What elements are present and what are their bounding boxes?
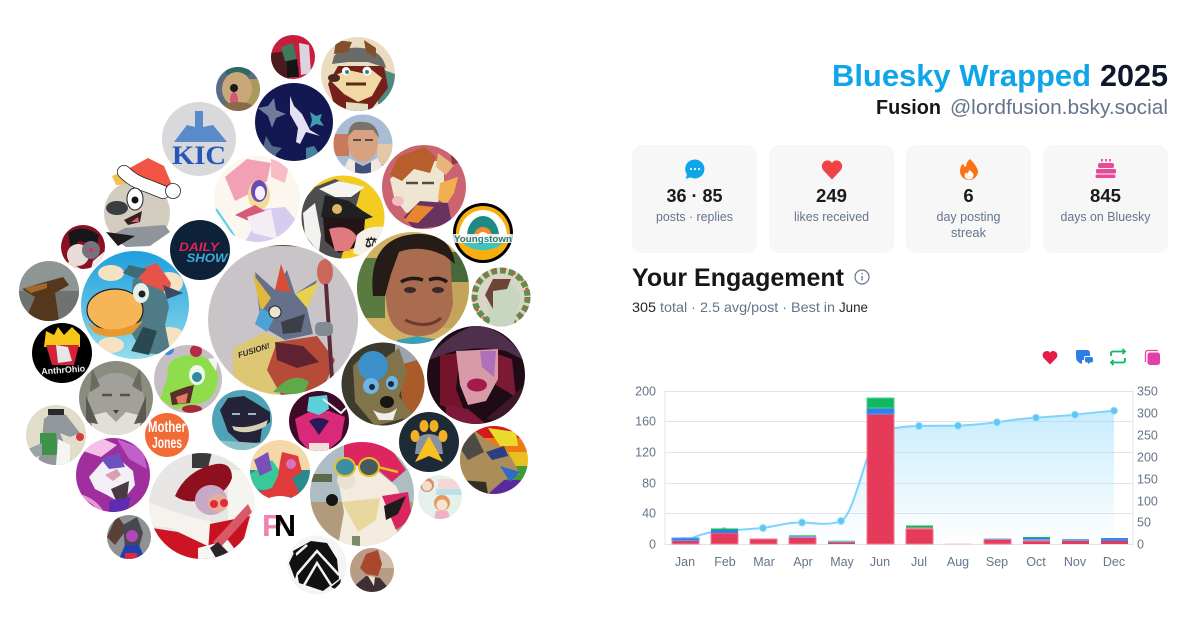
- user name and handle: @lordfusion.bsky.social: [950, 96, 1168, 119]
- avatar: blue mohawk fursuit: [341, 342, 425, 426]
- bar: May: [828, 540, 855, 544]
- bar: Mar: [750, 539, 777, 544]
- icon: quotes legend: [1146, 350, 1160, 365]
- right axis labels: 50: [1137, 516, 1151, 530]
- avatar: blue sky parrot: [81, 251, 189, 359]
- icon: cake: [1096, 159, 1116, 178]
- month labels: Feb: [714, 555, 736, 569]
- icon: info: [855, 270, 869, 284]
- engagement summary: total · 2.5 avg/post · Best in: [660, 299, 835, 315]
- right axis labels: 0: [1137, 538, 1144, 552]
- avatar: cream dragon: [382, 145, 466, 229]
- avatar: red hat cosplay: [149, 452, 256, 559]
- avatar: PN logo: P: [262, 508, 283, 543]
- panel: likes received: [769, 145, 894, 253]
- avatar: Mother Jones logo: [145, 413, 189, 457]
- avatar: main fusion artwork: [208, 245, 358, 395]
- left axis labels: [635, 384, 656, 552]
- avatar: holographic stars: [255, 83, 333, 166]
- icon: replies legend: [1076, 350, 1094, 366]
- month labels: Oct: [1026, 555, 1046, 569]
- panel: days on Bluesky: [1043, 145, 1168, 253]
- avatar: brown hat fox: [321, 37, 395, 111]
- avatar: Mother Jones logo: Mother: [148, 419, 186, 436]
- avatar: brown bird: [19, 261, 79, 321]
- avatar: chibi girl: [418, 475, 462, 519]
- month labels: [675, 555, 1125, 569]
- avatar: puppy: [216, 67, 260, 114]
- month labels: Aug: [947, 555, 969, 569]
- avatar: peacock logo: [453, 203, 513, 263]
- panel: day posting streak: day posting: [936, 210, 1001, 224]
- avatar: heart queen: [289, 391, 349, 451]
- panel: likes received: likes received: [794, 210, 869, 224]
- avatar: snarling badger: [301, 175, 386, 259]
- left axis labels: 120: [635, 446, 656, 460]
- chart grid: [665, 391, 1133, 545]
- avatar: gray wolf in green shirt: [26, 405, 86, 465]
- panel: posts and replies: [632, 145, 757, 253]
- icon: likes legend: [1043, 351, 1057, 364]
- month labels: Jul: [911, 555, 927, 569]
- avatar: pink fursuit with sunglasses: [310, 442, 414, 546]
- right axis labels: [1137, 384, 1158, 552]
- area under cumulative line: [685, 411, 1114, 544]
- bar: Sep: [984, 538, 1011, 544]
- right axis labels: 300: [1137, 406, 1158, 420]
- panel: posts and replies: posts · replies: [656, 210, 733, 224]
- avatar: red and black character: [61, 225, 105, 269]
- title: 2025: [1100, 59, 1168, 93]
- avatar: pink duck: [214, 156, 300, 242]
- bar: Jun: [867, 398, 894, 544]
- avatar: pony with wreath: [471, 267, 531, 327]
- avatar: AnthrOhio logo: [32, 323, 92, 383]
- title: Bluesky Wrapped: [832, 59, 1091, 93]
- chart: monthly engagement: [635, 384, 1158, 569]
- right axis labels: 200: [1137, 450, 1158, 464]
- icon: reposts legend: [1111, 349, 1125, 365]
- avatar: red pony: [250, 440, 310, 500]
- avatar cluster: [19, 35, 531, 595]
- avatar: dark dino: [212, 390, 272, 450]
- avatar: KIC logo: [162, 102, 236, 176]
- line points: [682, 407, 1118, 544]
- heading: your engagement: Your Engagement: [632, 264, 845, 292]
- avatar: PN logo: N: [274, 508, 296, 543]
- avatar: KIC logo: KIC: [172, 141, 226, 170]
- bar: Nov: [1062, 539, 1089, 544]
- avatar: Mother Jones logo: Jones: [152, 435, 182, 452]
- month labels: May: [830, 555, 855, 569]
- avatar: rainbow wolf: [460, 426, 528, 494]
- avatar: The Daily Show: [170, 220, 230, 280]
- month labels: Nov: [1064, 555, 1087, 569]
- panel: days on Bluesky: 845: [1090, 185, 1121, 206]
- bar: Aug: [945, 544, 972, 545]
- left axis labels: 160: [635, 414, 656, 428]
- avatar: green dragon: [154, 343, 222, 413]
- avatar: dark red and white: [271, 35, 315, 79]
- avatar: woman in hood: [426, 325, 526, 424]
- avatar: paw badge: [399, 412, 459, 472]
- stacked bars: [672, 398, 1128, 544]
- avatar: snarling badger: ⚖: [365, 234, 378, 250]
- right axis labels: 100: [1137, 494, 1158, 508]
- avatar: main fusion artwork: FUSION!: [237, 341, 271, 360]
- month labels: Sep: [986, 555, 1008, 569]
- bar: Jan: [672, 538, 699, 544]
- bar: Oct: [1023, 537, 1050, 544]
- panel: day posting streak: [906, 145, 1031, 253]
- user name and handle: Fusion: [876, 96, 941, 119]
- avatar: peacock logo: Youngstown: [454, 234, 512, 244]
- month labels: Apr: [793, 555, 813, 569]
- left axis labels: 80: [642, 476, 656, 490]
- panel: posts and replies: 36 · 85: [666, 185, 722, 206]
- icon: heart: [822, 160, 842, 180]
- month labels: Mar: [753, 555, 775, 569]
- left axis labels: 0: [649, 538, 656, 552]
- bar: Jul: [906, 526, 933, 544]
- avatar: purple wolf: [76, 438, 150, 512]
- avatar: smiling man: [357, 232, 469, 344]
- avatar: The Daily Show: DAILY: [179, 240, 220, 254]
- avatar: santa wolf sticker: [104, 158, 180, 247]
- right axis labels: 150: [1137, 472, 1158, 486]
- avatar: PN logo: [250, 496, 310, 556]
- icon: flame: [960, 159, 978, 180]
- cumulative line: [685, 411, 1114, 541]
- avatar: The Daily Show: SHOW: [186, 251, 229, 265]
- bar: Dec: [1101, 538, 1128, 544]
- engagement summary: June: [839, 299, 868, 315]
- month labels: Jun: [870, 555, 890, 569]
- avatar: lynx: [79, 361, 153, 435]
- panel: day posting streak: streak: [951, 226, 987, 240]
- bar: Apr: [789, 535, 816, 544]
- engagement summary: 305: [632, 299, 656, 315]
- panel: days on Bluesky: days on Bluesky: [1060, 210, 1151, 224]
- month labels: Jan: [675, 555, 695, 569]
- right axis labels: 350: [1137, 384, 1158, 398]
- right axis labels: 250: [1137, 428, 1158, 442]
- avatar: small gray character: [107, 515, 151, 559]
- icon: chat bubble: [685, 159, 704, 179]
- avatar: black and white linework: [287, 535, 347, 595]
- month labels: Dec: [1103, 555, 1125, 569]
- avatar: red fox in suit: [350, 548, 394, 592]
- panel: likes received: 249: [816, 185, 847, 206]
- chart legend: [1043, 349, 1160, 366]
- avatar: AnthrOhio logo: AnthrOhio: [41, 363, 86, 376]
- avatar: man with glasses: [333, 114, 394, 174]
- left axis labels: 200: [635, 384, 656, 398]
- bar: Feb: [711, 528, 738, 544]
- left axis labels: 40: [642, 506, 656, 520]
- panel: day posting streak: 6: [963, 185, 974, 206]
